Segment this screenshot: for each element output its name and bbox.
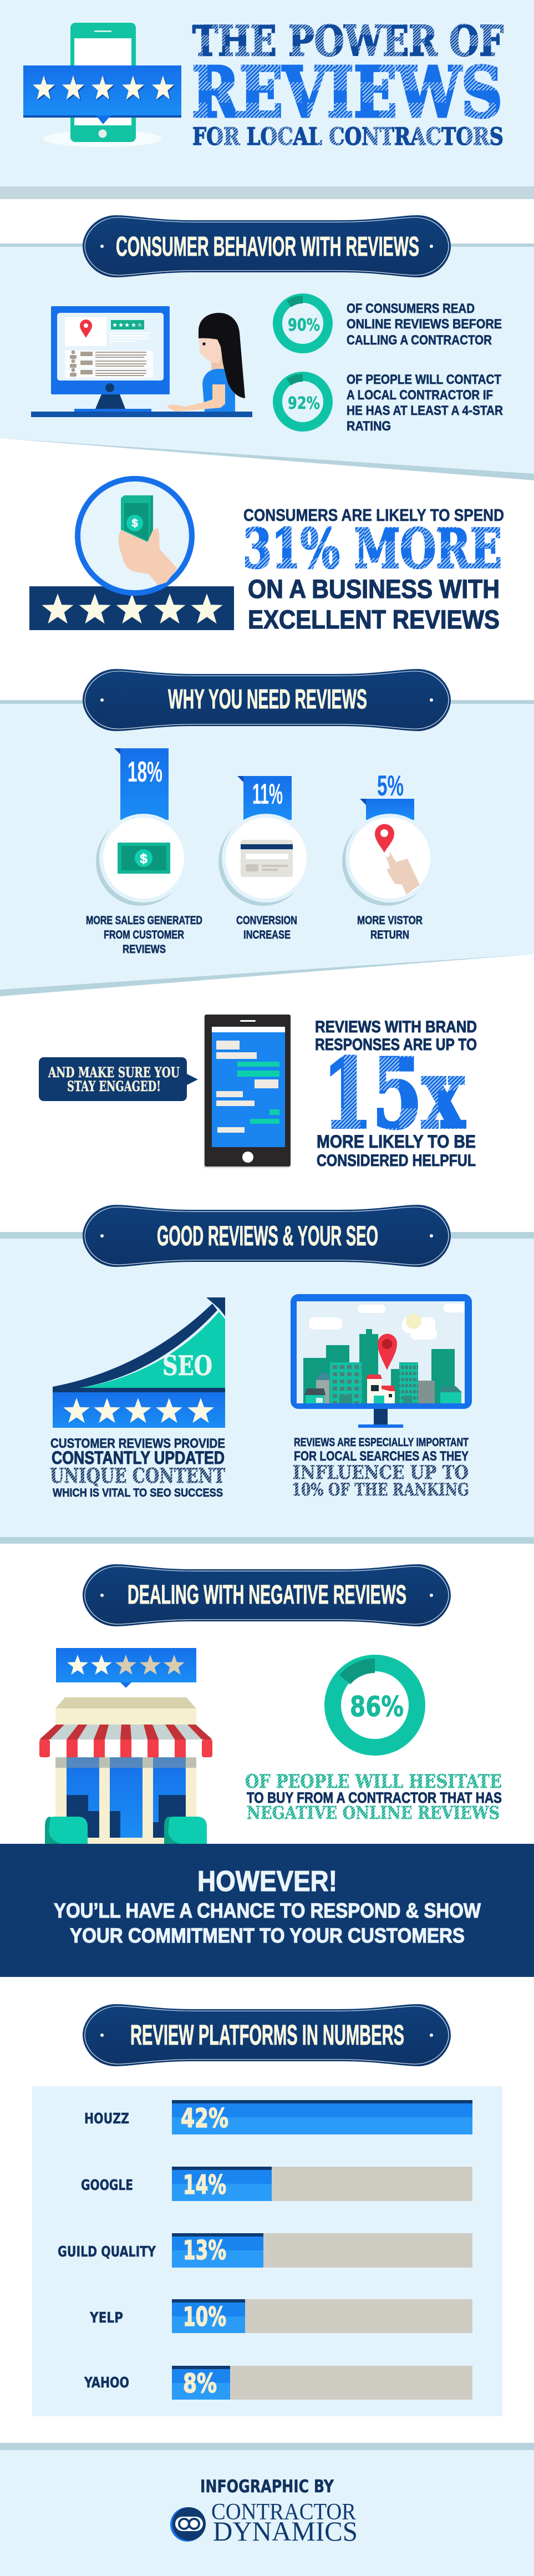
label: more sales: REVIEWS bbox=[123, 943, 166, 956]
stat: 86 percent donut bbox=[333, 1663, 417, 1747]
bar: Guild Quality 13 percent: 13% bbox=[183, 2235, 226, 2266]
ribbon: 11 percent bbox=[237, 776, 292, 820]
text: local search ranking: 10% OF THE RANKING bbox=[292, 1480, 469, 1500]
icon: smartphone with star rating bbox=[23, 23, 181, 147]
bar: Houzz 42 percent: HOUZZ bbox=[84, 2111, 129, 2127]
icon: monitor with city bbox=[291, 1294, 472, 1428]
panel: however band bbox=[0, 1844, 534, 1977]
icon: pointing hand with map pin in circle bbox=[342, 814, 434, 906]
panel: bar chart bbox=[32, 2086, 502, 2416]
bar: Google 14 percent: 14% bbox=[183, 2170, 226, 2200]
ribbon: 11 percent: 11% bbox=[252, 778, 283, 810]
callout: stay engaged: AND MAKE SURE YOU bbox=[48, 1064, 180, 1081]
icon: phone with chat bbox=[204, 1015, 291, 1168]
bar: Houzz 42 percent: 42% bbox=[181, 2103, 228, 2134]
stat: 92 percent donut bbox=[277, 376, 328, 427]
text: people will hesitate bbox=[245, 1771, 502, 1823]
callout: stay engaged: STAY ENGAGED! bbox=[67, 1078, 161, 1094]
label: conversion increase: INCREASE bbox=[243, 929, 291, 941]
logo: Contractor Dynamics: DYNAMICS bbox=[213, 2516, 358, 2547]
icon: rating box with two stars bbox=[56, 1648, 196, 1688]
section: spend more bbox=[29, 479, 504, 634]
section: why you need reviews bbox=[0, 669, 534, 996]
text: local search ranking: INFLUENCE UP TO bbox=[293, 1462, 469, 1484]
label: more visitor return bbox=[357, 914, 423, 941]
bar: Google 14 percent bbox=[81, 2167, 472, 2201]
logo: Contractor Dynamics bbox=[170, 2499, 358, 2547]
text: unique content: WHICH IS VITAL TO SEO SUCCESS bbox=[53, 1487, 223, 1499]
panel: however band: YOU’LL HAVE A CHANCE TO RESPOND & SHOW bbox=[54, 1899, 481, 1922]
bar: Houzz 42 percent bbox=[84, 2100, 472, 2134]
bar: Yelp 10 percent: YELP bbox=[89, 2310, 123, 2326]
ribbon: 5 percent bbox=[360, 770, 414, 820]
bar: Guild Quality 13 percent bbox=[58, 2233, 472, 2268]
text: unique content: CUSTOMER REVIEWS PROVIDE bbox=[50, 1436, 225, 1451]
text: 31 percent more bbox=[243, 505, 504, 634]
text: infographic by: INFOGRAPHIC BY bbox=[200, 2477, 334, 2497]
heading banner: why you need reviews: WHY YOU NEED REVIEWS bbox=[168, 684, 367, 714]
illustration: storefront bbox=[39, 1697, 212, 1844]
text: 15x more likely: RESPONSES ARE UP TO bbox=[315, 1036, 477, 1054]
text: 31 percent more: EXCELLENT REVIEWS bbox=[248, 605, 500, 634]
icon: computer monitor with review page bbox=[31, 306, 252, 417]
bar: Yelp 10 percent bbox=[89, 2299, 472, 2333]
text: local search ranking: FOR LOCAL SEARCHES AS THEY bbox=[294, 1449, 469, 1464]
label: more visitor return: RETURN bbox=[370, 929, 409, 941]
logo: Contractor Dynamics: CONTRACTOR bbox=[211, 2499, 356, 2525]
text: 15x more likely: MORE LIKELY TO BE bbox=[317, 1132, 476, 1152]
text: 15x more likely: REVIEWS WITH BRAND bbox=[315, 1018, 477, 1036]
text: unique content: CONSTANTLY UPDATED bbox=[52, 1448, 225, 1468]
text: local search ranking bbox=[292, 1436, 469, 1500]
section: consumer behavior bbox=[0, 215, 534, 480]
section: good reviews and SEO bbox=[0, 1205, 534, 1544]
stat: 90 percent donut: 90% bbox=[288, 316, 320, 335]
text: 15x more likely: 15x bbox=[323, 1037, 465, 1150]
text: 90 percent stat bbox=[347, 301, 502, 348]
chart: SEO growth curve: SEO bbox=[162, 1350, 212, 1382]
icon: star band bbox=[29, 586, 234, 630]
icon: money bill in circle bbox=[96, 814, 188, 906]
stat: 86 percent donut: 86% bbox=[350, 1691, 404, 1723]
text: 15x more likely: CONSIDERED HELPFUL bbox=[317, 1152, 476, 1170]
text: 92 percent stat: A LOCAL CONTRACTOR IF bbox=[347, 388, 493, 403]
callout: stay engaged bbox=[39, 1057, 198, 1101]
text: 90 percent stat: CALLING A CONTRACTOR bbox=[347, 333, 492, 348]
bar: Yahoo 8 percent: 8% bbox=[183, 2369, 217, 2399]
text: 15x more likely bbox=[315, 1018, 477, 1170]
section: header bbox=[0, 0, 534, 199]
section: stay engaged bbox=[39, 1015, 477, 1170]
text: 92 percent stat: RATING bbox=[347, 419, 391, 434]
heading banner: good reviews and SEO bbox=[83, 1205, 451, 1267]
icon: credit card in circle bbox=[218, 814, 311, 906]
stat: 90 percent donut bbox=[277, 298, 328, 348]
ribbon: 18 percent bbox=[114, 748, 169, 820]
label: more sales: FROM CUSTOMER bbox=[104, 929, 184, 941]
section: review platforms bbox=[32, 2004, 502, 2416]
heading banner: negative reviews bbox=[83, 1564, 451, 1626]
text: 90 percent stat: OF CONSUMERS READ bbox=[347, 301, 475, 316]
heading banner: why you need reviews bbox=[83, 669, 451, 731]
icon: money bill in circle: $ bbox=[140, 851, 148, 866]
section: footer bbox=[0, 2443, 534, 2576]
text: unique content: UNIQUE CONTENT bbox=[50, 1464, 225, 1488]
bar: Yelp 10 percent: 10% bbox=[183, 2302, 226, 2332]
text: 90 percent stat: ONLINE REVIEWS BEFORE bbox=[347, 317, 502, 332]
ribbon: 5 percent: 5% bbox=[377, 770, 404, 802]
bar: Google 14 percent: GOOGLE bbox=[81, 2177, 133, 2194]
heading banner: review platforms bbox=[83, 2004, 451, 2066]
label: more sales bbox=[86, 914, 202, 956]
bar: Guild Quality 13 percent: GUILD QUALITY bbox=[58, 2244, 156, 2260]
icon: hand holding money in circle bbox=[78, 479, 192, 593]
bar: Yahoo 8 percent: YAHOO bbox=[84, 2375, 129, 2391]
section: negative reviews bbox=[0, 1564, 534, 1977]
chart: SEO growth curve bbox=[53, 1297, 225, 1428]
bar: Yahoo 8 percent bbox=[84, 2366, 472, 2400]
text: 31 percent more: ON A BUSINESS WITH bbox=[248, 574, 500, 604]
text: 92 percent stat: OF PEOPLE WILL CONTACT bbox=[347, 372, 501, 387]
label: more sales: MORE SALES GENERATED bbox=[86, 914, 202, 927]
title bbox=[192, 17, 504, 151]
illustration: woman at desk bbox=[167, 313, 245, 412]
panel: however band: YOUR COMMITMENT TO YOUR CUSTOMERS bbox=[70, 1924, 465, 1947]
text: 92 percent stat bbox=[347, 372, 503, 434]
heading banner: consumer behavior bbox=[83, 215, 451, 277]
label: conversion increase: CONVERSION bbox=[236, 914, 297, 927]
text: 92 percent stat: HE HAS AT LEAST A 4-STAR bbox=[347, 403, 503, 418]
text: local search ranking: REVIEWS ARE ESPECIALLY IMPORTANT bbox=[294, 1436, 469, 1449]
text: unique content bbox=[50, 1436, 225, 1499]
label: more visitor return: MORE VISTOR bbox=[357, 914, 423, 927]
icon: hand holding money in circle: $ bbox=[131, 518, 138, 530]
ribbon: 18 percent: 18% bbox=[128, 756, 162, 788]
stat: 92 percent donut: 92% bbox=[288, 394, 320, 413]
panel: however band: HOWEVER! bbox=[197, 1865, 337, 1898]
label: conversion increase bbox=[236, 914, 297, 941]
